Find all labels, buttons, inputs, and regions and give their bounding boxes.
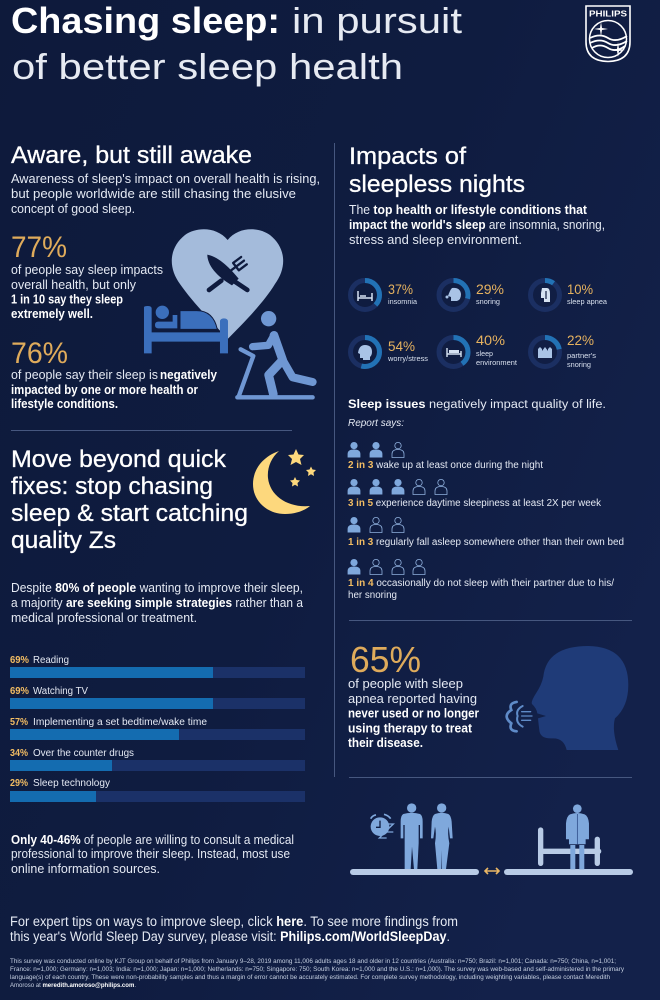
bar: Implementing a set bedtime/wake time 57%: Implementing a set bedtime/wake time — [33, 717, 207, 728]
stat: 76%: 76% — [11, 337, 68, 370]
stat row: 1 in 4 — [348, 559, 614, 601]
heading: Aware, but still awake: Aware, but still awake — [11, 142, 252, 169]
icon: heart with knife and fork — [172, 229, 283, 339]
intro text: Awareness of sleep's impact on overall health is rising, — [11, 172, 320, 186]
heading: Move beyond quick fixes: quality Zs — [11, 527, 116, 554]
icon: moon and stars — [253, 449, 316, 514]
text: Despite 80% — [11, 581, 303, 625]
donut: partner's snoring 22%: 22% — [567, 332, 594, 348]
stat: 77%: overall health, but only — [11, 278, 137, 292]
stat: 65%: using therapy to treat — [348, 722, 473, 736]
heading: Move beyond quick fixes: Move beyond quick — [11, 446, 227, 473]
donut: partner's snoring 22% — [530, 332, 596, 369]
bar: Reading 69%: Reading — [33, 655, 69, 666]
text: expert tips: For expert tips on ways to improve sleep, click here. To see more findings from — [10, 914, 458, 929]
bar: Watching TV 69%: 69% — [10, 686, 29, 697]
stat row: 2 in 3 — [348, 442, 543, 471]
woman — [431, 803, 453, 869]
icon: head silhouette exhaling — [507, 646, 628, 750]
text: top health conditions — [349, 203, 605, 247]
man — [401, 803, 423, 869]
stat: 65%: never used or no longer — [348, 706, 479, 720]
stat: 77%: 77% — [11, 231, 67, 264]
donut: snoring 29%: snoring — [476, 297, 500, 306]
platforms and arrow — [350, 868, 633, 875]
bar chart: sleep strategies — [10, 655, 305, 802]
text: Only 40-46%: Only 40-46% of people are willing to consult a medical — [11, 833, 294, 847]
heading: Move beyond quick fixes: fixes: stop chasing — [11, 473, 213, 500]
stat: 65%: their disease. — [348, 736, 423, 750]
icon: person in bed — [144, 306, 228, 353]
text: top health conditions: stress and sleep environment. — [349, 233, 522, 247]
donut: sleep apnea 10%: 10% — [567, 281, 593, 297]
stat: 76%: of people say their sleep is — [11, 368, 158, 382]
text: Only 40-46% — [11, 833, 294, 876]
title: Chasing sleep: — [11, 0, 280, 41]
stat row: 3 in 5 — [348, 479, 602, 509]
stat: 77%: 1 in 10 say they sleep — [11, 292, 123, 306]
stat: 77%: extremely well. — [11, 307, 93, 321]
donut: snoring 29%: 29% — [476, 281, 504, 297]
stat: 76%: impacted by one or more health or — [11, 383, 198, 397]
stat row: 1 in 4: 1 in 4 occasionally do not sleep with their partner due to his/ — [348, 578, 614, 589]
stat: 65%: apnea reported having — [348, 692, 477, 706]
icon: Philips logo: PHILIPS — [589, 10, 628, 18]
donut: snoring 29% — [439, 280, 504, 310]
donut: sleep environment 40%: sleep — [476, 349, 493, 358]
text: report says: Report says: — [348, 418, 404, 429]
icon: Philips logo — [586, 6, 630, 62]
donut: sleep apnea 10% — [530, 280, 608, 310]
bar: Sleep technology 29%: 29% — [10, 778, 28, 789]
text: Despite 80%: a majority are seeking simple strategies rather than a — [11, 596, 303, 610]
stat: 77%: of people say sleep impacts — [11, 263, 163, 277]
heading: Impacts of sleepless nights: sleepless nights — [349, 171, 525, 198]
text: top health conditions: The top health or lifestyle conditions that — [349, 203, 588, 217]
title: in pursuit — [292, 0, 462, 41]
bar: Implementing a set bedtime/wake time 57%: 57% — [10, 717, 28, 728]
bar: Watching TV 69%: Watching TV — [33, 686, 88, 697]
text: Only 40-46%: professional to improve their sleep. Instead, most use — [11, 847, 290, 861]
stat: 65% — [348, 639, 479, 750]
bar: Implementing a set bedtime/wake time 57% — [10, 717, 305, 740]
heading: Sleep issues: Sleep issues negatively impact quality of life. — [348, 399, 606, 411]
heading: Move beyond quick fixes: sleep & start catching — [11, 500, 248, 527]
donut: worry/stress 54%: 54% — [388, 338, 415, 354]
donut: partner's snoring 22%: partner's — [567, 351, 596, 360]
illustration: couple with alarm clock — [371, 803, 453, 869]
donut: insomnia 37%: insomnia — [388, 297, 418, 306]
title — [11, 0, 462, 87]
text: Despite 80%: medical professional or treatment. — [11, 611, 197, 625]
stat: 76%: negatively — [160, 368, 217, 382]
donut: worry/stress 54% — [350, 338, 428, 366]
footnote: language(s) of each country. These were non-probability samples and thus a margin of error cannot be accurately estimated. For complete survey methodology, including weighting variables, please contact Meredith — [10, 974, 611, 981]
donut: worry/stress 54%: worry/stress — [387, 354, 428, 363]
text: Only 40-46%: online information sources. — [11, 862, 160, 876]
heading: Move beyond quick fixes — [11, 446, 248, 554]
illustration: doctor and bed — [541, 804, 599, 869]
intro text: but people worldwide are still chasing the elusive — [11, 187, 296, 201]
icon: alarm clock with Zzz — [371, 814, 393, 838]
heading: Impacts of sleepless nights — [349, 143, 525, 198]
stat: 65%: of people with sleep — [348, 677, 463, 691]
text: top health conditions: impact the world's sleep are insomnia, snoring, — [349, 218, 605, 232]
bar: Over the counter drugs 34%: Over the counter drugs — [33, 748, 134, 759]
bar: Reading 69% — [10, 655, 305, 678]
intro text: concept of good sleep. — [11, 202, 135, 216]
donut: sleep environment 40%: environment — [476, 358, 518, 367]
footnote — [10, 958, 625, 989]
donut: insomnia 37%: 37% — [388, 281, 413, 297]
bar: Sleep technology 29% — [10, 778, 305, 802]
footnote: This survey was conducted online by KJT Group on behalf of Philips from January 9–28, 2019 among 11,006 adults ages 18 and older in 12 countries (Australia: n=750; Brazil: n=1,001; Canada: n=750; China, n=1,001; — [10, 958, 616, 965]
stat: 77% — [11, 231, 163, 321]
stat row: 1 in 3: 1 in 3 regularly fall asleep somewhere other than their own bed — [348, 537, 624, 548]
stat row: 3 in 5: 3 in 5 experience daytime sleepiness at least 2X per week — [348, 498, 602, 509]
text: expert tips: this year's World Sleep Day survey, please visit: Philips.com/WorldSleepDay. — [10, 929, 450, 944]
text: expert tips — [10, 914, 458, 944]
title: of better sleep health — [12, 46, 403, 87]
stat row: 1 in 3 — [348, 517, 624, 548]
donut: sleep environment 40%: 40% — [476, 332, 505, 348]
stat row: 1 in 4: her snoring — [348, 590, 397, 601]
stat: 76% — [11, 337, 217, 411]
heading: Impacts of sleepless nights: Impacts of — [349, 143, 466, 170]
bar: Over the counter drugs 34% — [10, 748, 305, 771]
intro text — [11, 172, 320, 216]
arrow — [485, 868, 499, 874]
stat: 65%: 65% — [350, 639, 421, 680]
bar: Watching TV 69% — [10, 686, 305, 709]
donut: partner's snoring 22%: snoring — [567, 360, 591, 369]
icon: person on treadmill — [237, 311, 313, 397]
stat: 76%: lifestyle conditions. — [11, 397, 118, 411]
text: Despite 80%: Despite 80% of people wanting to improve their sleep, — [11, 581, 303, 595]
footnote: France: n=1,000; Germany: n=1,003; India: n=1,000; Japan: n=1,000; Netherlands: n=750; Singapore: 750; South Korea: n=1,000 and the U.S.: n=1,000). The survey was web-based and self-administered in the primary — [10, 966, 625, 973]
stat row: 2 in 3: 2 in 3 wake up at least once during the night — [348, 460, 543, 471]
donut: sleep apnea 10%: sleep apnea — [567, 297, 608, 306]
footnote: Amoroso at meredith.amoroso@philips.com. — [10, 982, 136, 989]
donut: insomnia 37% — [350, 280, 418, 310]
donut: sleep environment 40% — [439, 332, 518, 367]
bar: Reading 69%: 69% — [10, 655, 29, 666]
bar: Over the counter drugs 34%: 34% — [10, 748, 28, 759]
bar: Sleep technology 29%: Sleep technology — [33, 778, 110, 789]
